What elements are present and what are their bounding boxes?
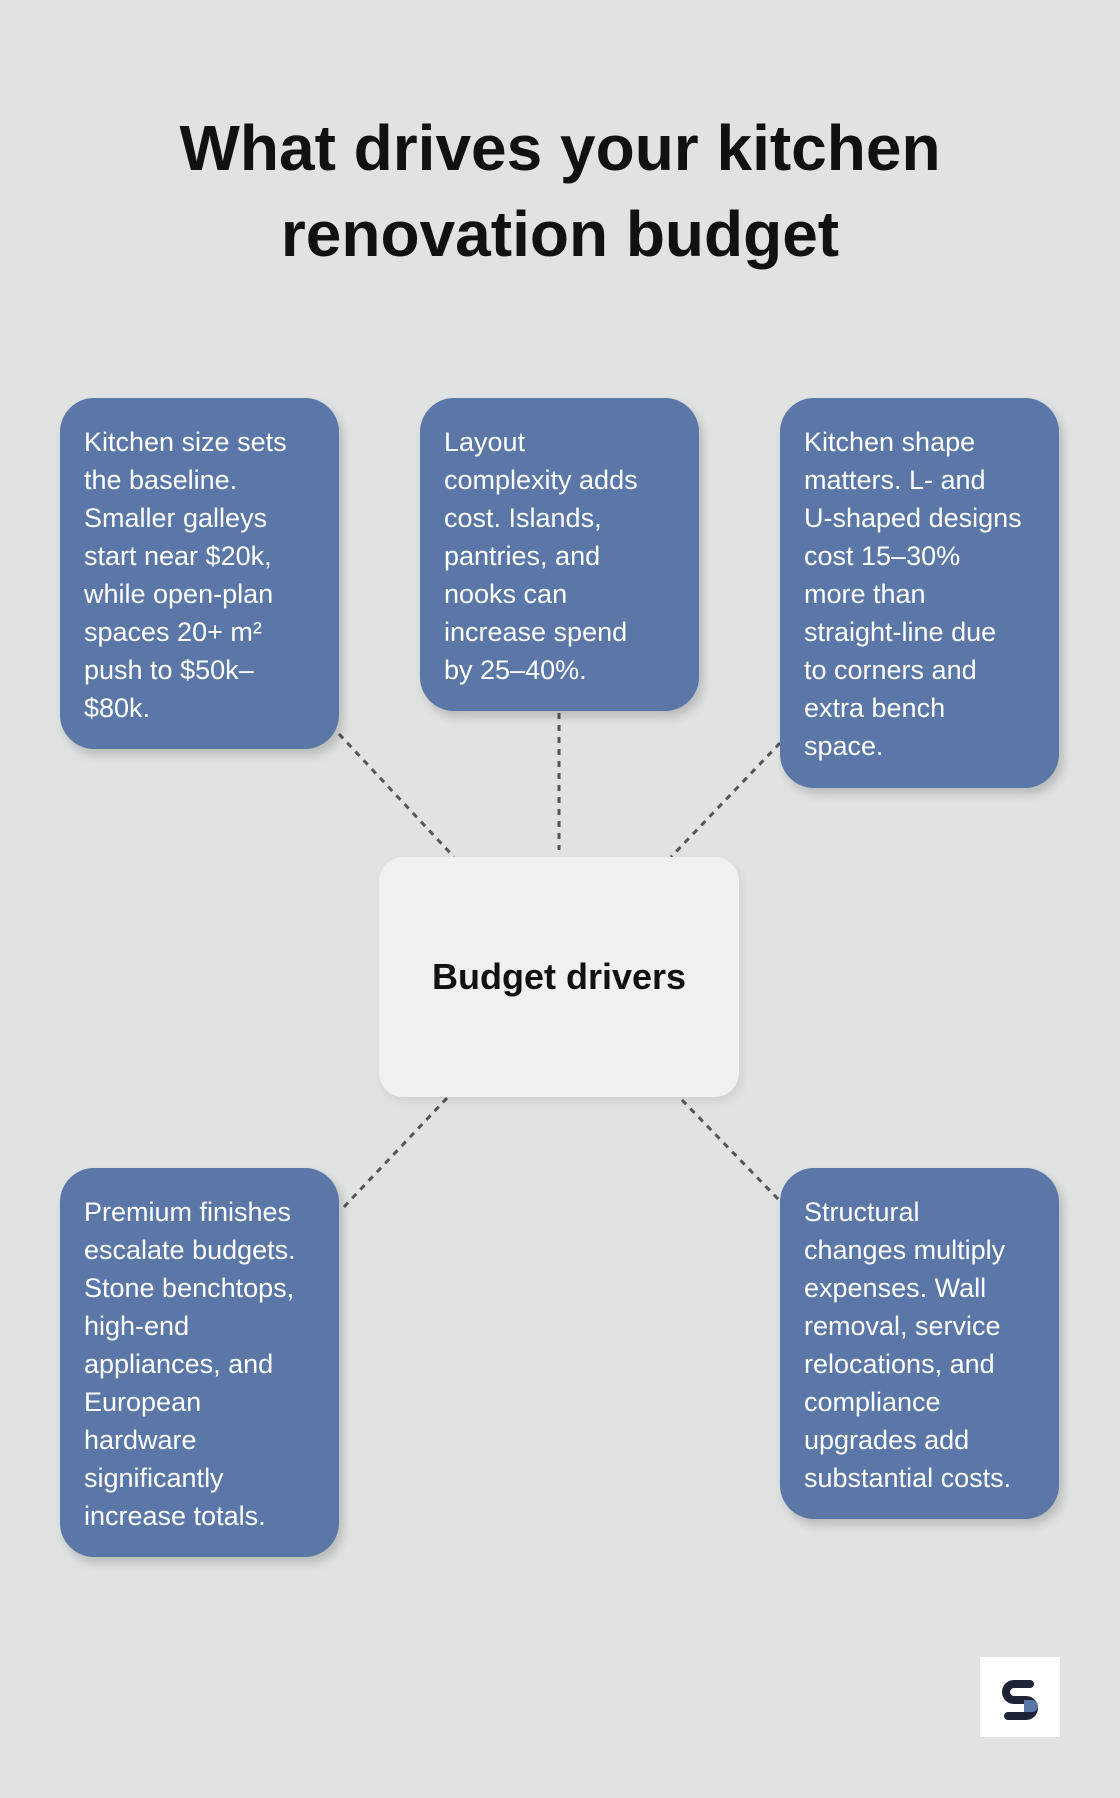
panel: kitchen shape (780, 398, 1059, 788)
panel: kitchen size: start near $20k, (84, 541, 272, 571)
panel: premium finishes: European (84, 1387, 201, 1417)
panel: structural changes: expenses. Wall (804, 1273, 986, 1303)
panel: kitchen shape: Kitchen shape (804, 427, 975, 457)
panel: layout complexity: Layout (444, 427, 525, 457)
panel: premium finishes (60, 1168, 339, 1557)
panel: premium finishes: escalate budgets. (84, 1235, 296, 1265)
panel: layout complexity: complexity adds (444, 465, 638, 495)
panel: layout complexity: increase spend (444, 617, 627, 647)
panel: structural changes: compliance (804, 1387, 941, 1417)
center node (379, 857, 739, 1097)
panel: premium finishes: Stone benchtops, (84, 1273, 294, 1303)
panel: structural changes: removal, service (804, 1311, 1001, 1341)
icon: logo (980, 1657, 1060, 1737)
center node: Budget drivers (432, 956, 686, 997)
panel: kitchen size: while open-plan (84, 579, 273, 609)
panel: layout complexity (420, 398, 699, 711)
panel: kitchen size: spaces 20+ m² (84, 617, 262, 647)
panel: structural changes: upgrades add (804, 1425, 969, 1455)
panel: kitchen shape: to corners and (804, 655, 977, 685)
panel: kitchen size: the baseline. (84, 465, 237, 495)
panel: premium finishes: Premium finishes (84, 1197, 291, 1227)
panel: structural changes: changes multiply (804, 1235, 1005, 1265)
panel: kitchen shape: matters. L- and (804, 465, 986, 495)
panel: kitchen shape: U-shaped designs (804, 503, 1022, 533)
panel: kitchen size: Kitchen size sets (84, 427, 287, 457)
panel: kitchen shape: cost 15–30% (804, 541, 960, 571)
panel: structural changes: relocations, and (804, 1349, 995, 1379)
panel: premium finishes: significantly (84, 1463, 224, 1493)
panel: structural changes: Structural (804, 1197, 920, 1227)
panel: kitchen shape: extra bench (804, 693, 945, 723)
panel: structural changes: substantial costs. (804, 1463, 1011, 1493)
panel: premium finishes: increase totals. (84, 1501, 266, 1531)
title: What drives your kitchen (179, 112, 941, 184)
panel: kitchen shape: more than (804, 579, 926, 609)
panel: layout complexity: nooks can (444, 579, 567, 609)
panel: kitchen size: push to $50k– (84, 655, 254, 685)
panel: kitchen size (60, 398, 339, 749)
title: renovation budget (281, 198, 839, 270)
panel: structural changes (780, 1168, 1059, 1519)
panel: kitchen shape: straight-line due (804, 617, 996, 647)
panel: kitchen size: $80k. (84, 693, 150, 723)
title (179, 112, 941, 270)
panel: layout complexity: cost. Islands, (444, 503, 602, 533)
panel: premium finishes: hardware (84, 1425, 197, 1455)
panel: kitchen shape: space. (804, 731, 884, 761)
panel: layout complexity: by 25–40%. (444, 655, 587, 685)
panel: premium finishes: high-end (84, 1311, 189, 1341)
panel: layout complexity: pantries, and (444, 541, 600, 571)
panel: kitchen size: Smaller galleys (84, 503, 267, 533)
panel: premium finishes: appliances, and (84, 1349, 273, 1379)
